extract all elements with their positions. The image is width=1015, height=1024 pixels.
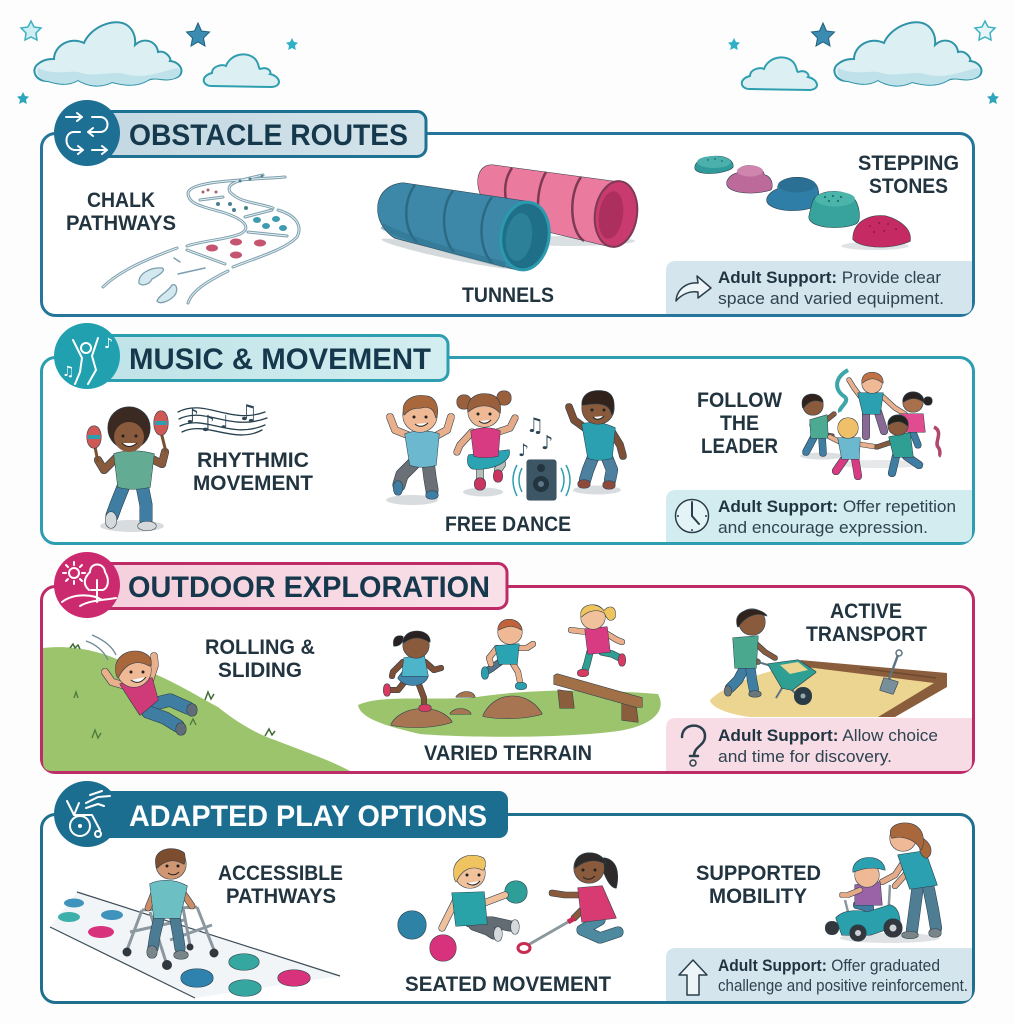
- text: rolling and sliding: SLIDING: [218, 659, 302, 682]
- icon: dancer: ♪: [104, 336, 113, 352]
- illustration: tunnels: [378, 165, 641, 273]
- illustration: musical notes on staff: ♩: [220, 412, 228, 433]
- child green: [806, 437, 823, 453]
- mounds: [391, 709, 452, 727]
- text: accessible pathways: PATHWAYS: [226, 885, 336, 908]
- text: stepping stones: STONES: [869, 175, 948, 198]
- boy running: [482, 620, 533, 690]
- text: varied terrain: VARIED TERRAIN: [424, 742, 592, 765]
- text: adult support: Adult Support: Offer repetition: [718, 497, 956, 516]
- adult support box: music: and encourage expression.: [718, 518, 928, 537]
- text: accessible pathways: ACCESSIBLE: [218, 862, 343, 885]
- text: supported mobility: SUPPORTED: [696, 862, 821, 885]
- text: supported mobility: [696, 862, 821, 908]
- speaker: [513, 460, 570, 500]
- illustration: stepping stones: [695, 156, 910, 250]
- adult support box: outdoor: and time for discovery.: [718, 747, 892, 766]
- text: chalk pathways: CHALK: [87, 189, 155, 212]
- illustration: child rolling down hill: [70, 635, 275, 738]
- star: small teal lower: [17, 92, 29, 104]
- illustration: musical notes on staff: [178, 401, 267, 437]
- heading: adapted play options: [54, 781, 508, 847]
- text: rolling and sliding: [205, 636, 315, 682]
- walker: [127, 907, 214, 962]
- text: stepping stones: STEPPING: [858, 152, 959, 175]
- heading: music and movement: [54, 323, 448, 389]
- text: seated movement: SEATED MOVEMENT: [405, 973, 611, 996]
- heading: obstacle routes: OBSTACLE ROUTES: [129, 119, 408, 152]
- girl: [457, 391, 515, 496]
- star: small teal lower right: [987, 92, 999, 104]
- illustration: child with maracas: [87, 407, 168, 532]
- text: rhythmic movement: RHYTHMIC: [197, 449, 309, 472]
- star: pale: [21, 21, 41, 40]
- text: stepping stones: [858, 152, 959, 198]
- question mark dot: [690, 760, 696, 766]
- text: active transport: TRANSPORT: [806, 623, 927, 646]
- illustration: musical notes on staff: ♪: [186, 404, 199, 428]
- text: follow the leader: THE: [720, 412, 759, 435]
- balls: [398, 911, 426, 939]
- text: rhythmic movement: MOVEMENT: [193, 472, 313, 495]
- text: chalk pathways: PATHWAYS: [66, 212, 176, 235]
- illustration: children dancing with speaker: ♪: [541, 432, 553, 454]
- cloud: large right: [834, 22, 981, 86]
- text: follow the leader: LEADER: [701, 435, 778, 458]
- reaching tool: [528, 918, 575, 945]
- panel: music and movement: [42, 323, 974, 544]
- heading: outdoor exploration: OUTDOOR EXPLORATION: [128, 571, 490, 604]
- child: [153, 918, 159, 948]
- adult support box: outdoor: [666, 718, 972, 771]
- text: adult support: Adult Support: Allow choice: [718, 726, 938, 745]
- blue tunnel: [378, 183, 553, 273]
- decoration: clouds and stars, right: [728, 21, 999, 104]
- star: blue: [186, 23, 210, 46]
- cloud: large left: [34, 22, 181, 86]
- text: chalk pathways: [66, 189, 176, 235]
- icon: clock: [676, 500, 708, 532]
- icon: dancer: [54, 323, 120, 389]
- text: tunnels: TUNNELS: [462, 284, 554, 307]
- girl running: [384, 631, 441, 712]
- text: adult support: Adult Support: Provide clear: [718, 268, 941, 287]
- star: pale right: [975, 21, 995, 40]
- adult support box: obstacle routes: space and varied equipment.: [718, 289, 944, 308]
- boy left: [386, 396, 451, 505]
- illustration: musical notes on staff: ♪: [201, 412, 215, 437]
- icon: route arrows: [54, 100, 120, 166]
- text: free dance: FREE DANCE: [445, 513, 571, 536]
- icon: curved arrow: [676, 276, 711, 301]
- illustration: children dancing with speaker: ♪: [518, 441, 529, 461]
- illustration: sandbox and wheelbarrow: [710, 609, 947, 717]
- adult: [912, 885, 918, 930]
- bench: [558, 690, 638, 722]
- heading: obstacle routes: [54, 100, 426, 166]
- notes: ♫: [526, 413, 544, 437]
- adult support box: music: [666, 490, 972, 542]
- text: active transport: ACTIVE: [830, 600, 902, 623]
- star: blue right: [812, 23, 834, 46]
- star: small teal right: [728, 38, 740, 50]
- shovel: [888, 655, 898, 682]
- panel: outdoor exploration: [42, 552, 974, 772]
- text: rolling and sliding: ROLLING &: [205, 636, 315, 659]
- ride-on car: [845, 885, 890, 920]
- child: [730, 665, 746, 688]
- decoration: clouds and stars, left: [17, 21, 298, 104]
- child pale blue: [836, 458, 858, 476]
- star: small teal: [286, 38, 298, 50]
- girl jumping: [571, 605, 626, 676]
- illustration: seated movement with balls: [398, 853, 618, 961]
- child blue: [892, 456, 919, 473]
- heading: music and movement: MUSIC & MOVEMENT: [129, 343, 431, 376]
- illustration: adult supporting child on ride-on: [826, 823, 941, 943]
- illustration: varied terrain with children: [358, 605, 661, 737]
- heading: outdoor exploration: [54, 552, 507, 618]
- panel: adapted play options: [42, 781, 974, 1002]
- panel: obstacle routes: [42, 100, 974, 316]
- heading: adapted play options: ADAPTED PLAY OPTIONS: [129, 800, 487, 833]
- adult support box: adapted: [666, 948, 972, 1001]
- icon: dancer: ♫: [62, 364, 75, 380]
- text: adult support: Adult Support: Offer graduated: [718, 956, 940, 975]
- boy right: [569, 391, 623, 494]
- illustration: chalk pathway: [103, 175, 299, 303]
- illustration: grassy hill: [43, 647, 350, 771]
- text: supported mobility: MOBILITY: [709, 885, 807, 908]
- illustration: children dancing with speaker: [386, 391, 623, 505]
- illustration: children in a circle with ribbons: [800, 370, 941, 476]
- child pink: [912, 430, 918, 445]
- icon: wheelchair and hand: [54, 781, 120, 847]
- child: [857, 905, 870, 925]
- illustration: accessible pathway strip: [50, 849, 340, 998]
- illustration: musical notes on staff: ♫: [238, 401, 258, 426]
- cloud: small right: [742, 57, 817, 90]
- adult support box: obstacle routes: [666, 261, 972, 314]
- adult support box: adapted: challenge and positive reinforcement.: [718, 976, 968, 995]
- child teal leader: [866, 412, 884, 436]
- seated boy: [470, 922, 510, 934]
- icon: question mark: [682, 726, 705, 756]
- seated girl: [582, 920, 618, 938]
- text: rhythmic movement: [193, 449, 313, 495]
- icon: sun, tree, hill: [54, 552, 120, 618]
- text: accessible pathways: [218, 862, 343, 908]
- text: follow the leader: FOLLOW: [697, 389, 782, 412]
- text: active transport: [806, 600, 927, 646]
- text: follow the leader: [697, 389, 782, 458]
- ribbons: [837, 370, 848, 412]
- wheelbarrow: [758, 662, 800, 698]
- cloud: small left: [204, 54, 279, 87]
- pink tunnel: [478, 165, 641, 250]
- icon: up arrow: [679, 960, 707, 995]
